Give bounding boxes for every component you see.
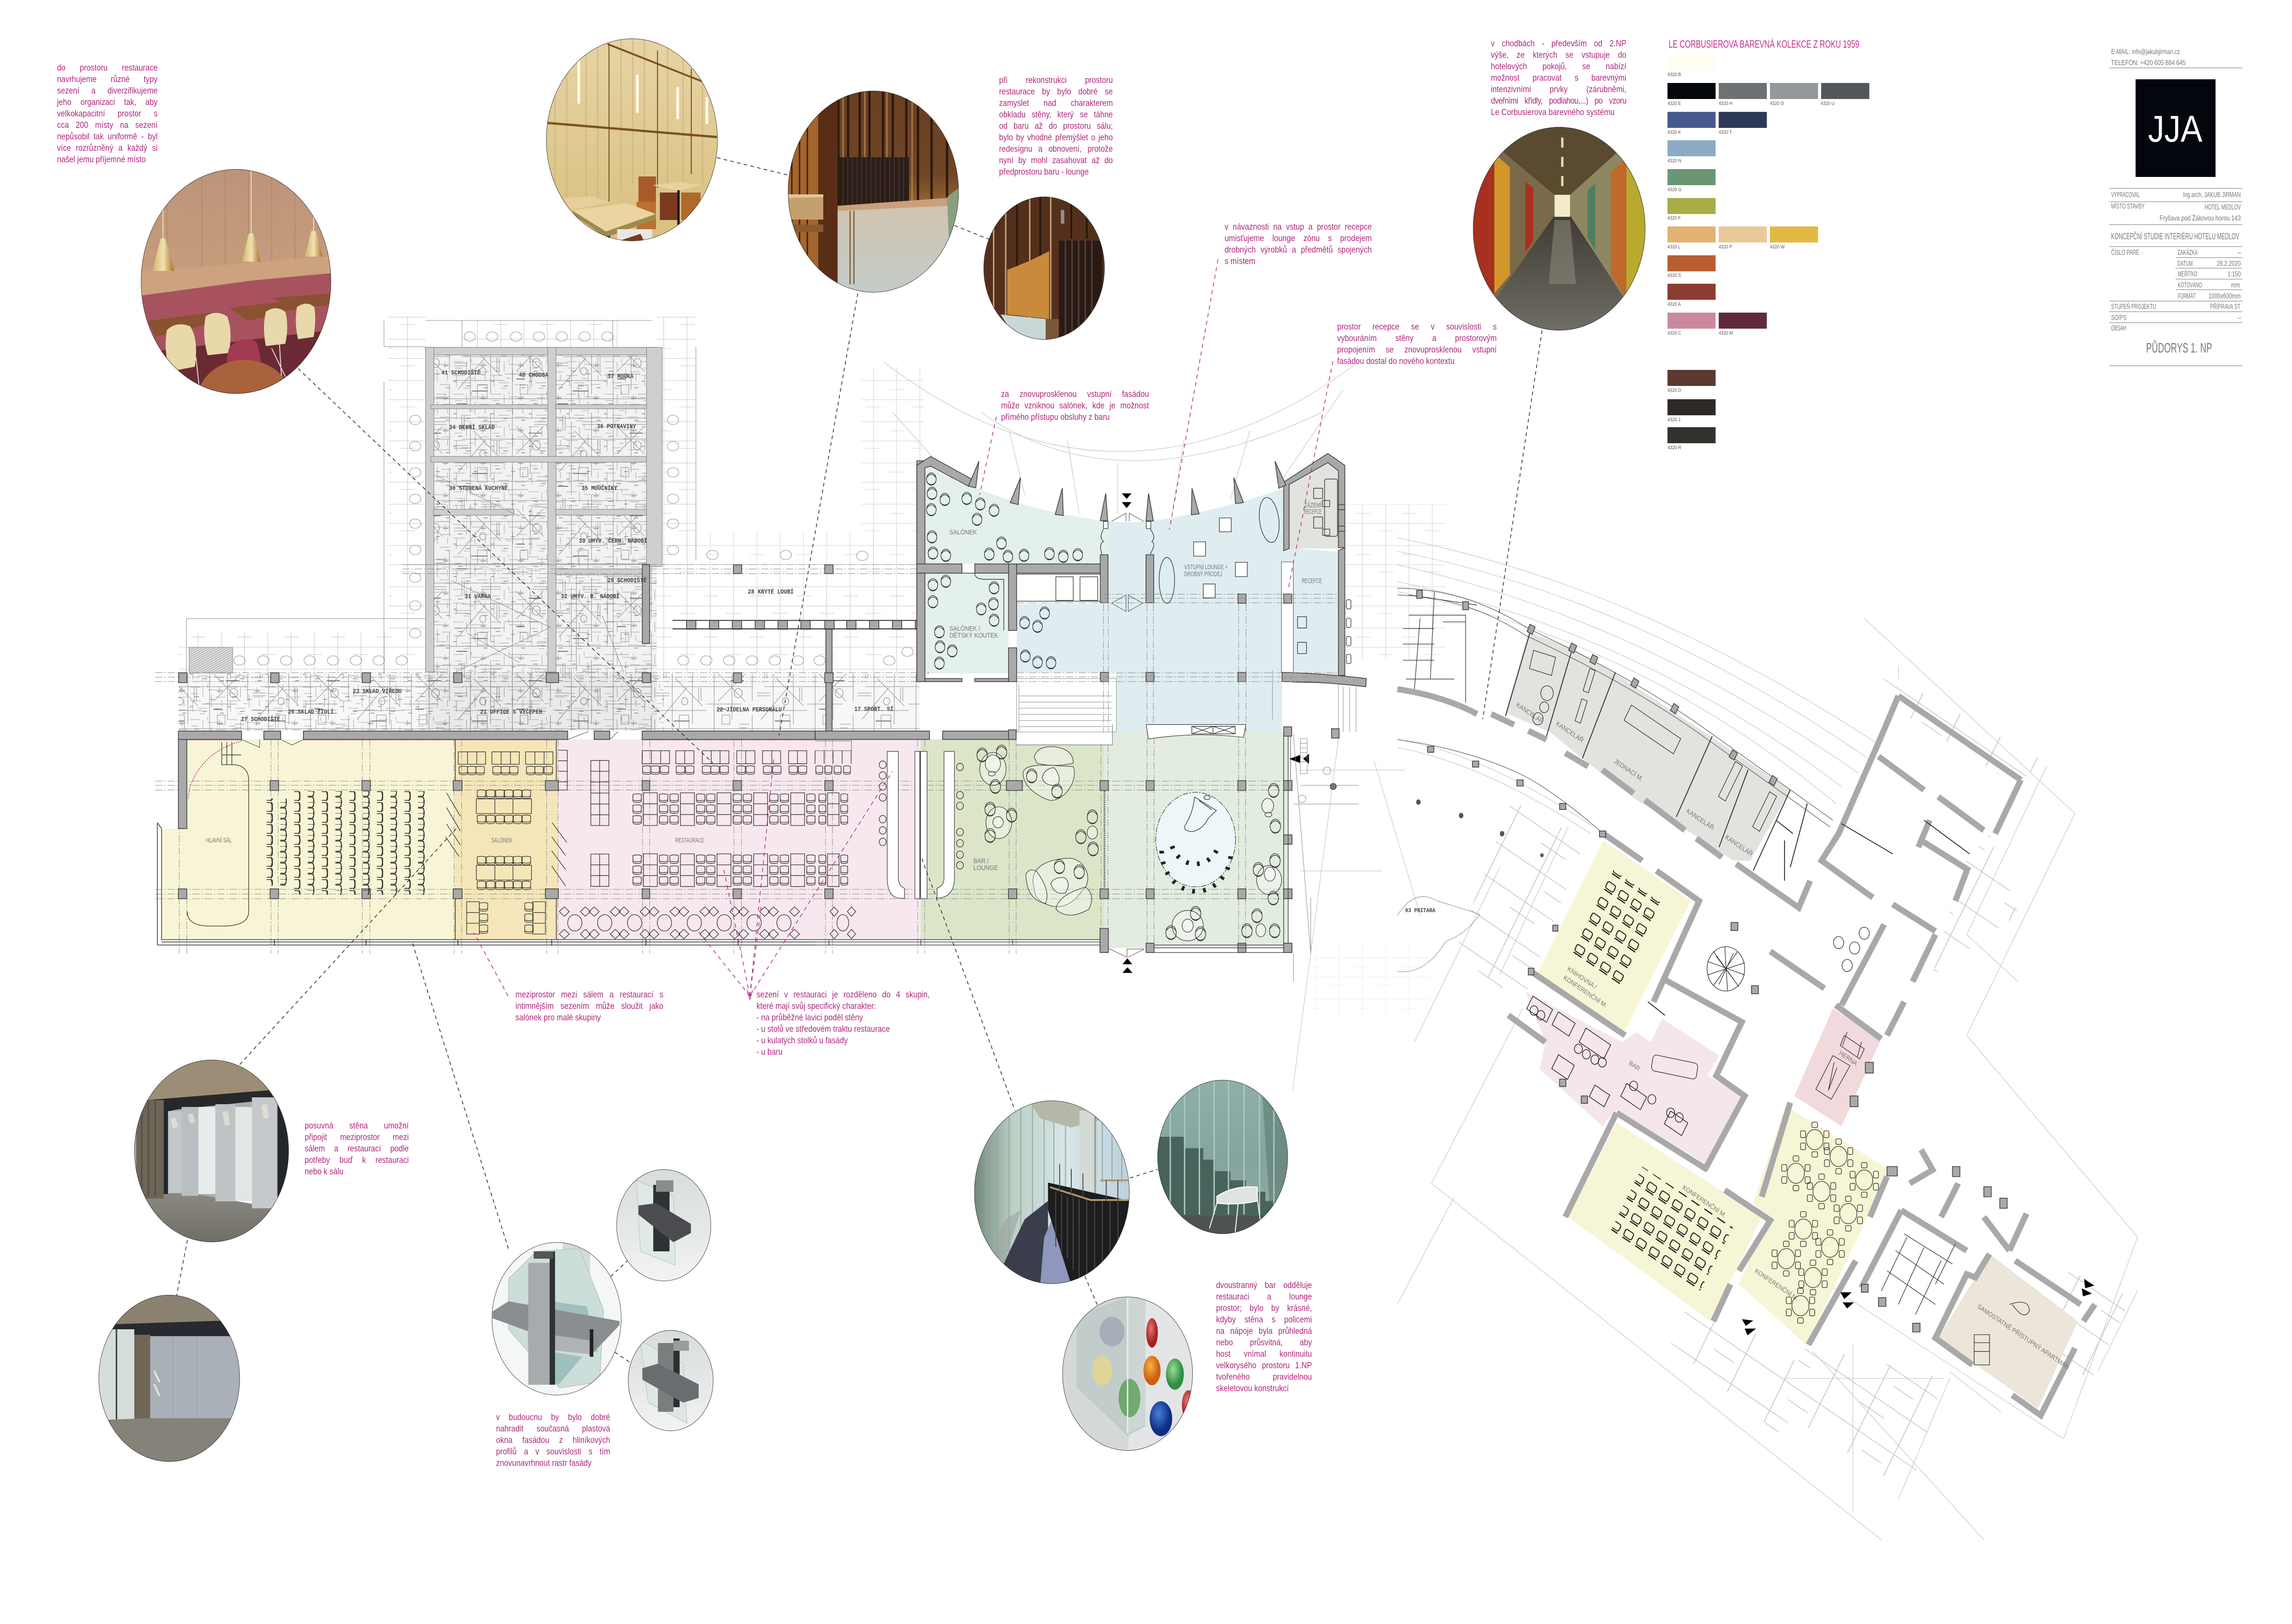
plan: main hall audience chairs — [265, 791, 431, 895]
text: wall cladding note: zamyslet nad charakterem — [999, 98, 1113, 108]
plan: right curved wing rooms, walls and furniture: JEDNACÍ M. — [1613, 757, 1644, 783]
title block: – — [2237, 249, 2242, 257]
plan: bar and lounge furniture and walls — [815, 725, 1359, 982]
text: wall cladding note: redesignu a obnovení, protože — [999, 144, 1113, 154]
title block: TELEFON: +420 605 884 645 — [2111, 59, 2186, 67]
title block: DATUM — [2177, 260, 2193, 268]
text: facade note: znovunavrhnout rastr fasády — [496, 1458, 591, 1468]
text: reception note — [1337, 321, 1497, 367]
plan: right curved wing rooms, walls and furniture: KANCELÁŘ — [1515, 701, 1545, 726]
scanned technical drawing: kitchen block — [155, 316, 925, 731]
text: corridor colours note: v chodbách - především od 2.NP — [1491, 39, 1626, 49]
title block: – — [2237, 314, 2242, 322]
text: seating types note — [57, 62, 158, 165]
text: lounge zone note: umisťujeme lounge zónu s prodejem — [1224, 233, 1372, 243]
photo: facade profile detail dark — [617, 1169, 711, 1281]
text: reception note: fasádou dostal do nového kontextu — [1337, 356, 1455, 366]
text: corridor colours note: dveřními křídly, podlahou,...) po vzoru — [1491, 96, 1626, 106]
text: restaurant seating groups note: které mají svůj specifický charakter: — [756, 1001, 876, 1011]
scanned technical drawing: kitchen block: 40 CHODBA — [519, 371, 548, 379]
plan: entrance wing room colours, walls and furniture — [917, 453, 1366, 732]
colour palette: Le Corbusier collection: 4320 M — [1719, 330, 1733, 336]
room labels: RECEPCE — [1304, 507, 1322, 515]
plan: restaurant wing room colours — [161, 732, 1288, 948]
scanned technical drawing: kitchen block: 35 MOUČNÍKY — [581, 484, 617, 492]
text: wall cladding note — [999, 75, 1113, 178]
text: double-sided bar note: host vnímal kontinuitu — [1216, 1349, 1312, 1359]
scanned technical drawing: kitchen block: 29 SCHODIŠTĚ — [607, 577, 647, 584]
room labels: ZÁZEMÍ — [1304, 501, 1322, 509]
text: restaurant seating groups note: - na průběžné lavici podél stěny — [756, 1013, 863, 1023]
room labels: SALÓNEK / — [949, 624, 980, 632]
text: wall cladding note: od baru až do prostoru sálu; — [999, 121, 1113, 131]
text: seating types note: navrhujeme různé typy — [57, 74, 158, 84]
plan: right curved wing rooms, walls and furniture: KANCELÁŘ — [1724, 833, 1754, 858]
text: lounge zone note: s místem — [1224, 256, 1255, 266]
room labels: BAR / — [974, 857, 989, 864]
text: double-sided bar note: nebo průsvitná, aby — [1216, 1338, 1312, 1348]
text: double-sided bar note: kdyby stěna s policemi — [1216, 1315, 1312, 1325]
colour palette: Le Corbusier collection: 4320 B — [1668, 72, 1681, 77]
scanned technical drawing: kitchen block: 33 UMÝV. ČERN. NÁDOBÍ — [579, 537, 647, 545]
text: lounge zone note: drobných výrobků a předmětů spojených — [1224, 245, 1372, 255]
colour palette: Le Corbusier collection: 4320 A — [1668, 302, 1681, 307]
title block: 1:150 — [2227, 270, 2241, 278]
plan: right curved wing rooms, walls and furniture: KONFERENČNÍ M. — [1562, 974, 1608, 1009]
colour palette: Le Corbusier collection — [1668, 38, 1869, 451]
title block: ZAKÁZKA — [2177, 248, 2198, 257]
title block: PŮDORYS 1. NP — [2146, 340, 2212, 355]
text: private room note: přímého přístupu obsluhy z baru — [1001, 412, 1110, 422]
text: restaurant seating groups note — [756, 989, 930, 1058]
room labels: LOUNGE — [974, 864, 998, 871]
text: seating types note: nepůsobil tak uniformě - byl — [57, 132, 158, 142]
text: facade note — [496, 1412, 610, 1469]
title block: VYPRACOVAL — [2111, 191, 2140, 199]
text: seating types note: našel jemu příjemné místo — [57, 154, 146, 165]
text: double-sided bar note: dvoustranný bar odděluje — [1216, 1280, 1312, 1290]
text: seating types note: cca 200 místy na sezení — [57, 120, 158, 130]
title block: MÍSTO STAVBY — [2111, 202, 2144, 210]
text: double-sided bar note — [1216, 1280, 1312, 1394]
title block: E-MAIL: info@jakubjirman.cz — [2111, 48, 2180, 56]
photo: frosted glass stair and chair — [1157, 1080, 1288, 1236]
photo: sliding wall panels closed — [99, 1295, 241, 1462]
text: private room note: může vzniknou salónek, kde je možnost — [1001, 401, 1149, 411]
title block: Ing.arch. JAKUB JIRMAN — [2183, 191, 2241, 199]
leader lines: black dashed photo links — [176, 158, 1542, 1363]
colour palette: Le Corbusier collection: 4320 D — [1668, 388, 1681, 393]
text: restaurant seating groups note: sezení v restauraci je rozděleno do 4 skupin, — [756, 990, 930, 1000]
text: intermediate space note — [515, 989, 663, 1024]
scanned technical drawing: kitchen block: 36 POTRAVINY — [597, 423, 636, 430]
colour palette: Le Corbusier collection: 4320 L — [1668, 244, 1680, 250]
scanned technical drawing: kitchen block: 34 DENNÍ SKLAD — [449, 424, 495, 431]
text: restaurant seating groups note: - u stolů ve středovém traktu restaurace — [756, 1024, 890, 1034]
scanned technical drawing: kitchen block: 17 SPORT. SÍ — [854, 705, 893, 713]
text: reception note: propojením se znovuprosklenou vstupní — [1337, 345, 1497, 355]
colour palette: Le Corbusier collection: 4320 C — [1668, 330, 1681, 336]
text: corridor colours note: Le Corbusierova barevného systému — [1491, 107, 1614, 117]
leader lines: magenta dashed annotation links — [474, 259, 1333, 999]
text: wall cladding note: restaurace by bylo dobré se — [999, 87, 1113, 97]
text: restaurant seating groups note: - u baru — [756, 1047, 782, 1057]
colour palette: Le Corbusier collection: 4320 J — [1668, 417, 1680, 423]
text: wall cladding note: nyní by mohl zasahovat až do — [999, 155, 1113, 165]
text: intermediate space note: intimnějším sezením může sloužit jako — [515, 1001, 663, 1011]
room labels — [206, 501, 1322, 871]
text: wall cladding note: obkladu stěny, který se táhne — [999, 110, 1113, 120]
room labels: DĚTSKÝ KOUTEK — [949, 631, 998, 639]
scanned technical drawing: kitchen block: 21 OFFICE S VÝČEPEM — [480, 708, 542, 716]
title block: MEŘÍTKO — [2178, 270, 2197, 278]
title block: HOTEL MEDLOV — [2204, 204, 2241, 211]
plan: right curved wing rooms, walls and furniture: BAR — [1628, 1059, 1641, 1073]
photo: dark wood slats and radiator — [788, 91, 959, 293]
plan: right curved wing rooms, walls and furniture: KONFERENČNÍ M. — [1754, 1267, 1800, 1303]
text: corridor colours note — [1491, 38, 1626, 118]
photo: aluminium facade profile large — [492, 1242, 622, 1395]
text: double-sided bar note: skeletovou konstrukcí — [1216, 1383, 1289, 1393]
text: restaurant seating groups note: - u kulatých stolků u fasády — [756, 1035, 848, 1046]
palette heading: LE CORBUSIEROVA BAREVNÁ KOLEKCE Z ROKU 1959 — [1669, 38, 1859, 50]
colour palette: Le Corbusier collection: 4320 S — [1668, 273, 1681, 278]
text: sliding wall note: posuvná stěna umožní — [305, 1121, 409, 1131]
text: seating types note: více rozrůzněný a každý si — [57, 143, 158, 153]
text: seating types note: jeho organizaci tak, aby — [57, 97, 158, 107]
plan: right curved wing rooms, walls and furniture — [1397, 588, 2095, 1415]
text: seating types note: sezení a diverzifikujeme — [57, 86, 158, 96]
scanned technical drawing: kitchen block: 27 SCHODIŠTĚ — [241, 716, 280, 723]
title block: PŘÍPRAVA ST — [2210, 303, 2240, 311]
text: lounge zone note — [1224, 221, 1372, 267]
title block: 28.2.2020 — [2217, 260, 2241, 268]
scanned technical drawing: kitchen block: 41 SCHODIŠTĚ — [441, 369, 480, 376]
title block: KONCEPČNÍ STUDIE INTERIÉRU HOTELU MEDLOV — [2111, 231, 2239, 241]
logo: JJA — [2136, 79, 2215, 177]
text: wall cladding note: bylo by vhodné přemýšlet o jeho — [999, 132, 1113, 143]
text: corridor colours note: možnost pracovat s barevnými — [1491, 73, 1626, 83]
title block: KÓTOVÁNO — [2178, 281, 2202, 289]
photo: sliding wall panels open — [134, 1060, 289, 1243]
scanned technical drawing: kitchen block: 22 JÍDELNA PERSONÁLU — [716, 706, 782, 713]
room labels: RECEPCE — [1302, 577, 1322, 584]
text: facade note: okna fasádou z hliníkových — [496, 1435, 610, 1445]
title block: ČÍSLO PARÉ — [2111, 248, 2139, 257]
colour palette: Le Corbusier collection: 4320 N — [1668, 158, 1681, 164]
scanned technical drawing: kitchen block: 30 STUDENÁ KUCHYNĚ — [449, 484, 508, 492]
title block: 1000x600mm — [2209, 292, 2241, 300]
colour palette: Le Corbusier collection: 4320 H — [1719, 101, 1732, 106]
text: wall cladding note: při rekonstrukci prostoru — [999, 75, 1113, 85]
photo: colourful hotel corridor — [1473, 127, 1645, 330]
plan: right curved wing rooms, walls and furniture: KANCELÁŘ — [1686, 807, 1715, 831]
scanned technical drawing: curved dimension lines and right wing surroundings — [884, 362, 2138, 1540]
text: facade note: profilů a v souvislosti s tím — [496, 1447, 610, 1457]
colour palette: Le Corbusier collection: 4320 T — [1719, 130, 1732, 135]
title block: Fryšava pod Žákovou horou 143 — [2160, 214, 2241, 222]
photo: facade profile detail grey — [628, 1330, 713, 1431]
scanned technical drawing: curved dimension lines and right wing surroundings: 93 PRITARA — [1405, 907, 1436, 914]
text: lounge zone note: v návaznosti na vstup a prostor recepce — [1224, 222, 1372, 232]
colour palette: Le Corbusier collection: 4320 P — [1719, 244, 1732, 250]
plan: right curved wing rooms, walls and furniture: HERNA — [1838, 1049, 1859, 1068]
colour palette: Le Corbusier collection: 4320 F — [1668, 215, 1681, 221]
text: double-sided bar note: prostor; bylo by krásné, — [1216, 1303, 1312, 1313]
colour palette: Le Corbusier collection: 4320 W — [1770, 244, 1785, 250]
scanned technical drawing: kitchen block: 23 SKLAD VÍŘEDU — [353, 688, 402, 695]
text: private room note: za znovuprosklenou vstupní fasádou — [1001, 389, 1149, 399]
text: sliding wall note — [305, 1120, 409, 1178]
text: double-sided bar note: tvořeného pravidelnou — [1216, 1372, 1312, 1382]
plan: right curved wing rooms, walls and furniture: SAMOSTATNĚ PŘÍSTUPNÝ APARTMÁN — [1976, 1303, 2070, 1371]
text: double-sided bar note: na nápoje byla průhledná — [1216, 1326, 1312, 1336]
title block: STUPEŇ PROJEKTU — [2111, 303, 2156, 311]
text: double-sided bar note: restauraci a lounge — [1216, 1292, 1312, 1302]
title block: FORMÁT — [2178, 292, 2196, 300]
text: facade note: nahradit současná plastová — [496, 1424, 610, 1434]
text: corridor colours note: výše, ze kterých se vstupuje do — [1491, 50, 1626, 60]
text: private room note — [1001, 389, 1149, 423]
colour palette: Le Corbusier collection: 4320 U — [1821, 101, 1835, 106]
photo: restaurant bench and lamps — [141, 169, 331, 394]
text: seating types note: do prostoru restaurace — [57, 63, 158, 73]
room labels: VSTUPNÍ LOUNGE + — [1184, 563, 1228, 571]
plan: right curved wing rooms, walls and furniture: KONFERENČNÍ M. — [1681, 1184, 1727, 1219]
photo: curved glass wall with railing — [974, 1101, 1130, 1285]
room labels: SALÓNEK — [491, 836, 512, 844]
title block: SO/PS — [2111, 314, 2127, 322]
text: facade note: v budoucnu by bylo dobré — [496, 1412, 610, 1422]
plan: restaurant, hall and salónek walls and furniture — [155, 731, 815, 954]
scanned technical drawing: kitchen block: 31 VARNA — [465, 593, 491, 600]
plan: right curved wing rooms, walls and furniture: KNIHOVNA / — [1566, 965, 1598, 991]
text: intermediate space note: salónek pro malé skupiny — [515, 1013, 601, 1023]
colour palette: Le Corbusier collection: 4320 R — [1668, 445, 1681, 451]
colour palette: Le Corbusier collection: 4320 K — [1668, 130, 1681, 135]
scanned technical drawing: kitchen block: 26 SKLAD ŽIDLÍ — [288, 708, 334, 716]
title block: OBSAH — [2111, 325, 2126, 332]
photo: light wood panels with wall lights — [546, 39, 718, 245]
photo: textured glass and coloured eggs — [1063, 1297, 1195, 1451]
colour palette: Le Corbusier collection: 4320 E — [1668, 101, 1681, 106]
text: sliding wall note: připojit meziprostor mezi — [305, 1132, 409, 1142]
room labels: DROBNÝ PRODEJ — [1184, 570, 1222, 578]
text: reception note: prostor recepce se v souvislosti s — [1337, 322, 1497, 332]
colour palette: Le Corbusier collection: 4320 O — [1770, 101, 1784, 106]
colour palette: Le Corbusier collection: 4320 G — [1668, 187, 1681, 193]
text: double-sided bar note: velkorysého prostoru 1.NP — [1216, 1360, 1312, 1371]
text: corridor colours note: hotelových pokojů, se nabízí — [1491, 61, 1626, 72]
text: intermediate space note: meziprostor mezi sálem a restaurací s — [515, 990, 663, 1000]
scanned technical drawing: kitchen block: 28 KRYTÉ LOUBÍ — [748, 588, 793, 595]
room labels: RESTAURACE — [675, 836, 704, 844]
text: corridor colours note: intenzivními prvky (zárubněmi, — [1491, 84, 1626, 94]
text: sliding wall note: sálem a restaurací podle — [305, 1144, 409, 1154]
text: wall cladding note: předprostoru baru - lounge — [999, 167, 1089, 177]
title block — [2109, 48, 2242, 366]
photo: wood slats with sun patch — [984, 197, 1105, 340]
text: sliding wall note: nebo k sálu — [305, 1167, 343, 1177]
logo: JJA: JJA — [2148, 108, 2203, 150]
scanned technical drawing: kitchen block: 32 UMÝV. B. NÁDOBÍ — [561, 593, 620, 600]
plan: right curved wing rooms, walls and furniture: KANCELÁŘ — [1555, 720, 1585, 744]
text: sliding wall note: potřeby buď k restauraci — [305, 1155, 409, 1165]
text: seating types note: velkokapacitní prostor s — [57, 109, 158, 119]
title block: mm — [2231, 281, 2240, 289]
scanned technical drawing: kitchen block: 37 MOUKA — [607, 373, 634, 380]
room labels: SALÓNEK — [949, 528, 977, 536]
text: reception note: vybouráním stěny a prostorovým — [1337, 333, 1497, 343]
room labels: HLAVNÍ SÁL — [206, 836, 232, 844]
